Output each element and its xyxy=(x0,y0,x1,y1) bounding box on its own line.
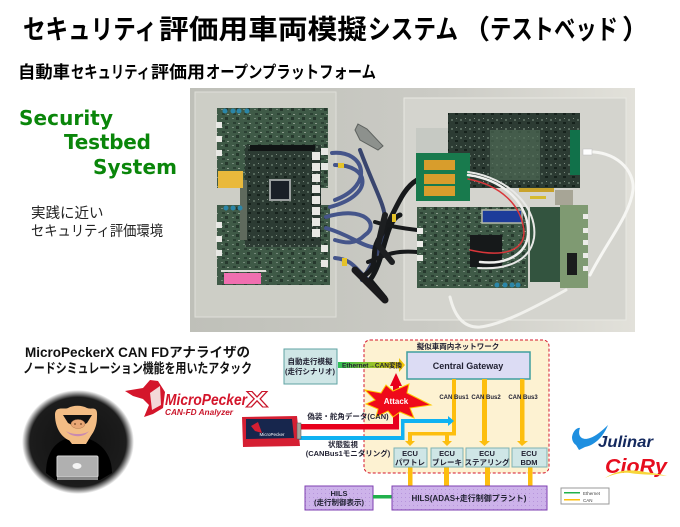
heading: Security Testbed System: Testbed xyxy=(64,130,151,154)
text block: realistic evaluation environment: セキュリティ評価環境 xyxy=(31,223,163,240)
label: status monitoring: 状態監視 xyxy=(328,439,358,449)
left boards xyxy=(216,108,330,285)
ECU boxes xyxy=(394,448,547,467)
ECU boxes: ECU xyxy=(439,449,455,458)
logo: MicroPeckerX CAN-FD Analyzer: X xyxy=(246,387,268,412)
title: セキュリティ xyxy=(23,15,157,45)
ECU boxes: ECU xyxy=(521,449,537,458)
icon: attack burst: Attack xyxy=(384,397,409,406)
CAN bus labels xyxy=(439,395,538,401)
heading: Security Testbed System: Security xyxy=(19,106,113,130)
arrow: Ethernet to CAN conversion: Ethernet→CAN変換 xyxy=(342,360,402,370)
box: Central Gateway xyxy=(407,352,530,379)
title xyxy=(23,15,649,45)
ECU boxes: ブレーキ xyxy=(432,457,462,467)
title: 評価用車両模擬 xyxy=(159,15,367,45)
attack heading xyxy=(23,345,252,376)
ECU boxes: ECU xyxy=(479,449,495,458)
box: HILS display: (走行制御表示) xyxy=(314,497,364,507)
box: HILS display xyxy=(305,486,373,510)
ECU boxes: BDM xyxy=(520,458,538,467)
box: HILS plant xyxy=(392,486,547,510)
arrow: attack path xyxy=(297,373,402,430)
label: spoofed steering data: 偽装・舵角データ(CAN) xyxy=(307,411,389,421)
cables xyxy=(326,150,417,300)
legend xyxy=(561,488,609,504)
right boards xyxy=(416,113,588,288)
box: HILS display: HILS xyxy=(330,489,348,498)
icon: hacker pig with laptop xyxy=(22,390,134,494)
logo: Julinar xyxy=(572,425,654,451)
subtitle: 自動車 xyxy=(18,62,70,82)
arrow: Ethernet to CAN conversion xyxy=(338,358,405,372)
label: status monitoring: (CANBus1モニタリング) xyxy=(306,448,391,458)
ECU boxes: ECU xyxy=(402,449,418,458)
subtitle: 評価用 xyxy=(151,63,205,82)
box: autonomous driving simulation xyxy=(284,349,337,384)
box: HILS plant: HILS(ADAS+走行制御プラント) xyxy=(412,493,527,503)
CAN bus lines xyxy=(405,379,532,486)
CAN bus labels: CAN Bus3 xyxy=(508,395,538,401)
photo: testbed hardware xyxy=(190,88,635,332)
device: MicroPeckerX hardware: MicroPecker xyxy=(259,432,285,437)
text block: realistic evaluation environment: 実践に近い xyxy=(31,205,104,222)
CAN bus labels: CAN Bus1 xyxy=(439,395,469,401)
logo: CioRy: CioRy xyxy=(605,456,668,478)
panel: in-vehicle network xyxy=(364,340,549,473)
arrow: monitoring path xyxy=(297,416,454,440)
logo: Julinar: Julinar xyxy=(598,434,654,451)
title: ） xyxy=(622,15,649,45)
subtitle xyxy=(18,62,376,82)
title: システム xyxy=(368,15,458,45)
subtitle: オープンプラットフォーム xyxy=(206,63,376,82)
logo: MicroPeckerX CAN-FD Analyzer: CAN-FD Analyzer xyxy=(165,407,234,417)
label: status monitoring xyxy=(306,439,391,458)
device: MicroPeckerX hardware xyxy=(242,416,301,447)
ECU boxes: パワトレ xyxy=(395,458,425,467)
logo: MicroPeckerX CAN-FD Analyzer xyxy=(125,380,268,417)
icon: attack burst xyxy=(365,384,431,418)
panel: in-vehicle network: 擬似車両内ネットワーク xyxy=(417,341,499,351)
attack heading: ノードシミュレーション機能を用いたアタック xyxy=(23,360,252,376)
logo: MicroPeckerX CAN-FD Analyzer: MicroPecker xyxy=(165,392,248,409)
box: autonomous driving simulation: (走行シナリオ) xyxy=(285,366,335,376)
legend: CAN xyxy=(583,498,593,503)
CAN bus labels: CAN Bus2 xyxy=(471,395,501,401)
legend: Ethernet xyxy=(583,491,601,496)
heading: Security Testbed System xyxy=(19,106,177,179)
text block: realistic evaluation environment xyxy=(31,205,163,240)
ECU boxes: ステアリング xyxy=(464,457,510,467)
title: テストベッド xyxy=(490,15,618,45)
title: （ xyxy=(463,15,490,45)
ethernet link xyxy=(373,495,392,498)
box: autonomous driving simulation: 自動走行模擬 xyxy=(288,356,333,366)
attack heading: MicroPeckerX CAN FDアナライザの xyxy=(25,345,250,360)
box: Central Gateway: Central Gateway xyxy=(433,361,503,371)
wiring xyxy=(450,152,633,327)
heading: Security Testbed System: System xyxy=(93,155,177,179)
subtitle: セキュリティ xyxy=(71,63,150,82)
